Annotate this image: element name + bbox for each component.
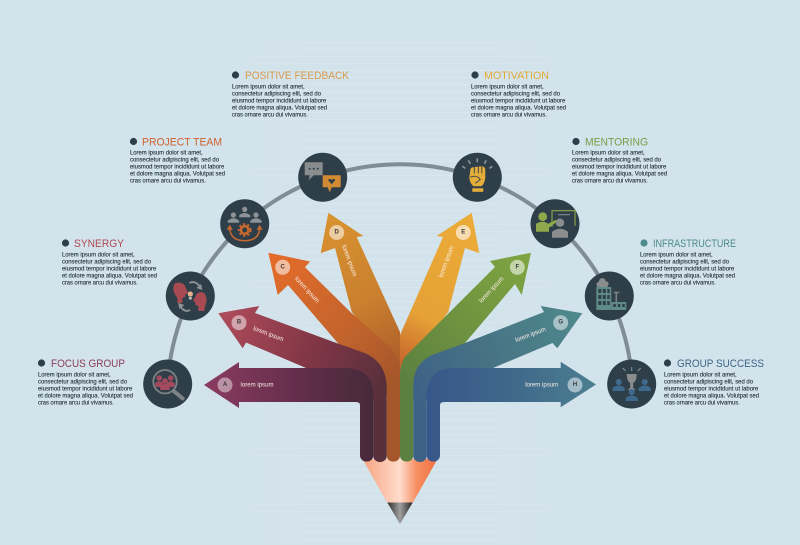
text block: positive feedback: eiusmod tempor incididunt ut labore [232, 97, 327, 104]
text block: synergy: consectetur adipiscing elit, sed do [62, 258, 151, 265]
text block: synergy [62, 238, 157, 286]
text block: group success: GROUP SUCCESS [677, 358, 764, 370]
text block: infrastructure: eiusmod tempor incididunt ut labore [640, 265, 735, 272]
arrow A: A [223, 382, 228, 388]
text block: focus group: et dolore magna aliqua. Volutpat sed [38, 392, 133, 399]
text block: motivation [471, 70, 566, 118]
text block: group success: eiusmod tempor incididunt ut labore [664, 385, 759, 392]
text block: project team: et dolore magna aliqua. Volutpat sed [130, 171, 225, 178]
text block: group success: consectetur adipiscing elit, sed do [664, 378, 753, 385]
text block: motivation: consectetur adipiscing elit, sed do [471, 90, 560, 97]
arrow C: C [281, 264, 286, 270]
text block: focus group: cras ornare arcu dui vivamus. [38, 399, 114, 406]
text block: group success: et dolore magna aliqua. Volutpat sed [664, 392, 759, 399]
arrow H: H [573, 382, 577, 388]
text block: mentoring: cras ornare arcu dui vivamus. [572, 178, 648, 185]
icon: positive feedback [298, 153, 347, 202]
text block: synergy: Lorem ipsum dolor sit amet, [62, 251, 135, 258]
text block: positive feedback: et dolore magna aliqua. Volutpat sed [232, 104, 327, 111]
text block: group success [664, 358, 764, 406]
text block: synergy: et dolore magna aliqua. Volutpat sed [62, 272, 157, 279]
text block: focus group: eiusmod tempor incididunt ut labore [38, 385, 133, 392]
text block: motivation: cras ornare arcu dui vivamus. [471, 111, 547, 118]
arrow B [218, 306, 387, 462]
arrow G: G [558, 320, 563, 326]
arrow A [204, 362, 373, 462]
arrow F: lorem ipsum [478, 276, 506, 304]
text block: focus group [38, 358, 133, 406]
icon: motivation [453, 153, 502, 202]
arrow B: lorem ipsum [252, 325, 284, 343]
text block: positive feedback: cras ornare arcu dui vivamus. [232, 111, 308, 118]
text block: focus group: FOCUS GROUP [51, 358, 125, 370]
connecting arc [167, 164, 633, 397]
text block: project team [130, 136, 225, 185]
text block: project team: eiusmod tempor incididunt ut labore [130, 164, 225, 171]
text block: mentoring: consectetur adipiscing elit, sed do [572, 157, 661, 164]
pencil tip [362, 459, 438, 524]
text block: project team: PROJECT TEAM [142, 136, 222, 148]
icon: infrastructure [585, 272, 634, 320]
text block: positive feedback [232, 70, 350, 118]
arrow D: lorem ipsum [340, 244, 358, 277]
arrow H [427, 362, 596, 462]
text block: motivation: et dolore magna aliqua. Volutpat sed [471, 104, 566, 111]
text block: synergy: eiusmod tempor incididunt ut labore [62, 265, 157, 272]
arrow F [400, 253, 531, 462]
text block: motivation: Lorem ipsum dolor sit amet, [471, 83, 544, 90]
arrow C [268, 253, 400, 462]
icon: group success [607, 360, 656, 408]
text block: project team: consectetur adipiscing elit, sed do [130, 157, 219, 164]
arrow E [400, 213, 479, 400]
text block: positive feedback: Lorem ipsum dolor sit amet, [232, 83, 305, 90]
text block: mentoring [572, 136, 667, 185]
text block: synergy: cras ornare arcu dui vivamus. [62, 279, 138, 286]
arrow E: lorem ipsum [438, 245, 456, 278]
icon: project team [220, 199, 269, 248]
text block: infrastructure: INFRASTRUCTURE [653, 238, 736, 250]
arrow G [413, 306, 582, 462]
icon: focus group [143, 360, 192, 408]
text block: focus group: consectetur adipiscing elit, sed do [38, 378, 127, 385]
text block: mentoring: et dolore magna aliqua. Volutpat sed [572, 171, 667, 178]
arrow D [321, 213, 400, 400]
text block: focus group: Lorem ipsum dolor sit amet, [38, 371, 111, 378]
arrow B: B [237, 320, 242, 326]
arrow A: lorem ipsum [240, 382, 274, 388]
text block: positive feedback: POSITIVE FEEDBACK [245, 70, 350, 82]
arrow F: F [515, 264, 519, 270]
text block: motivation: eiusmod tempor incididunt ut labore [471, 97, 566, 104]
arrow D: D [335, 230, 340, 236]
text block: infrastructure: Lorem ipsum dolor sit amet, [640, 251, 713, 258]
arrow G: lorem ipsum [515, 326, 547, 344]
icon: mentoring [530, 199, 580, 248]
text block: infrastructure [640, 238, 736, 286]
text block: mentoring: MENTORING [585, 136, 648, 148]
arrow H: lorem ipsum [525, 382, 558, 388]
icon: synergy [166, 272, 215, 320]
text block: synergy: SYNERGY [74, 238, 125, 250]
text block: mentoring: eiusmod tempor incididunt ut labore [572, 164, 667, 171]
text block: positive feedback: consectetur adipiscing elit, sed do [232, 90, 321, 97]
text block: project team: Lorem ipsum dolor sit amet, [130, 150, 203, 157]
arrow E: E [461, 230, 465, 236]
text block: mentoring: Lorem ipsum dolor sit amet, [572, 150, 645, 157]
text block: infrastructure: consectetur adipiscing elit, sed do [640, 258, 729, 265]
text block: motivation: MOTIVATION [484, 70, 549, 82]
text block: group success: Lorem ipsum dolor sit amet, [664, 371, 737, 378]
text block: infrastructure: et dolore magna aliqua. Volutpat sed [640, 272, 735, 279]
text block: group success: cras ornare arcu dui vivamus. [664, 399, 740, 406]
text block: project team: cras ornare arcu dui vivamus. [130, 178, 206, 185]
text block: infrastructure: cras ornare arcu dui vivamus. [640, 279, 716, 286]
arrow C: lorem ipsum [293, 276, 321, 304]
